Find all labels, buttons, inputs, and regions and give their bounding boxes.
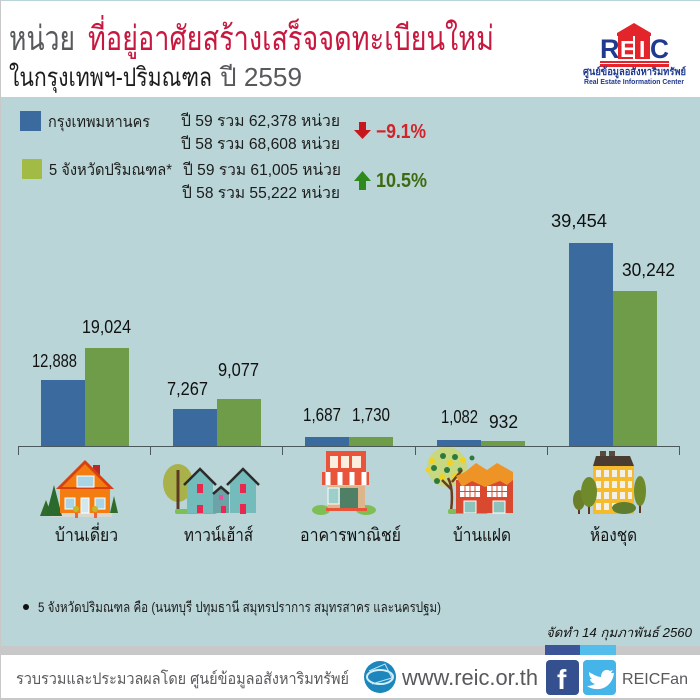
title: หน่วย: [9, 20, 75, 58]
logo: REIC: [583, 23, 686, 86]
title: [9, 15, 494, 93]
value labels: [32, 211, 675, 432]
logo: REIC: I: [639, 36, 645, 62]
logo: REIC: E: [620, 36, 635, 62]
value labels: 12,888: [32, 351, 77, 371]
value labels: 1,687: [303, 405, 341, 425]
icon: twitter: [583, 660, 616, 695]
icon: facebook: f: [557, 664, 567, 695]
legend: [20, 111, 427, 202]
footer panel: [1, 655, 700, 698]
bar chart: [18, 211, 680, 455]
Bangkok totals: [181, 112, 340, 153]
vicinity totals: [182, 161, 341, 202]
value labels: 30,242: [622, 260, 675, 280]
category labels: ห้องชุด: [590, 525, 637, 546]
logo: REIC: Real Estate Information Center: [584, 77, 684, 86]
footnote: 5 จังหวัดปริมณฑล คือ (นนทบุรี ปทุมธานี สมุทรปราการ สมุทรสาคร และนครปฐม): [38, 599, 441, 616]
arrow: down: [354, 122, 371, 139]
date note: จัดทำ 14 กุมภาพันธ์ 2560: [546, 625, 693, 641]
category labels: [55, 522, 637, 546]
legend swatch: Bangkok: [20, 111, 41, 131]
value labels: 1,730: [352, 405, 390, 425]
legend swatch: vicinity: [22, 159, 42, 179]
category labels: บ้านเดี่ยว: [55, 522, 118, 545]
vicinity totals: ปี 59 รวม 61,005 หน่วย: [183, 161, 341, 179]
Bangkok totals: ปี 58 รวม 68,608 หน่วย: [181, 135, 340, 153]
logo: REIC: R: [600, 34, 620, 64]
Twitter handle: REICFan: [622, 671, 688, 688]
icon: townhouse: [163, 464, 259, 514]
category labels: อาคารพาณิชย์: [300, 525, 401, 545]
bars: duplex: [437, 440, 525, 446]
icon: globe: [364, 661, 396, 693]
legend label: vicinity: 5 จังหวัดปริมณฑล*: [49, 162, 172, 179]
icon: duplex: [426, 447, 513, 514]
icon: facebook: [546, 660, 579, 695]
change: vicinity: 10.5%: [376, 170, 427, 192]
arrow: up: [354, 171, 371, 190]
bars: single house: [41, 348, 129, 446]
title: ที่อยู่อาศัยสร้างเสร็จจดทะเบียนใหม่: [88, 15, 494, 59]
category labels: ทาวน์เฮ้าส์: [184, 525, 253, 545]
footer credit: รวบรวมและประมวลผลโดย ศูนย์ข้อมูลอสังหาริมทรัพย์: [16, 669, 349, 689]
footer band: [0, 646, 700, 700]
vicinity totals: ปี 58 รวม 55,222 หน่วย: [182, 184, 340, 202]
Bangkok totals: ปี 59 รวม 62,378 หน่วย: [181, 112, 340, 130]
title: ปี 2559: [219, 62, 302, 92]
header panel: [1, 1, 700, 97]
value labels: 7,267: [167, 379, 208, 399]
bars: townhouse: [173, 399, 261, 446]
value labels: 19,024: [82, 317, 131, 337]
legend label: Bangkok: กรุงเทพมหานคร: [48, 114, 150, 132]
logo: REIC: ศูนย์ข้อมูลอสังหาริมทรัพย์: [583, 66, 686, 79]
icon: single house: [40, 460, 118, 518]
icon: condominium: [573, 451, 646, 514]
icon: shop: [312, 451, 376, 515]
bars: condominium: [569, 243, 657, 446]
logo: REIC: C: [650, 34, 669, 64]
change: Bangkok: −9.1%: [376, 121, 426, 143]
value labels: 1,082: [441, 407, 478, 427]
value labels: 9,077: [218, 360, 259, 380]
title: ในกรุงเทพฯ-ปริมณฑล: [9, 62, 212, 93]
value labels: 39,454: [551, 211, 607, 231]
value labels: 932: [489, 412, 518, 432]
website: www.reic.or.th: [401, 665, 538, 690]
bars: commercial building: [305, 437, 393, 446]
category labels: บ้านแฝด: [453, 525, 511, 545]
